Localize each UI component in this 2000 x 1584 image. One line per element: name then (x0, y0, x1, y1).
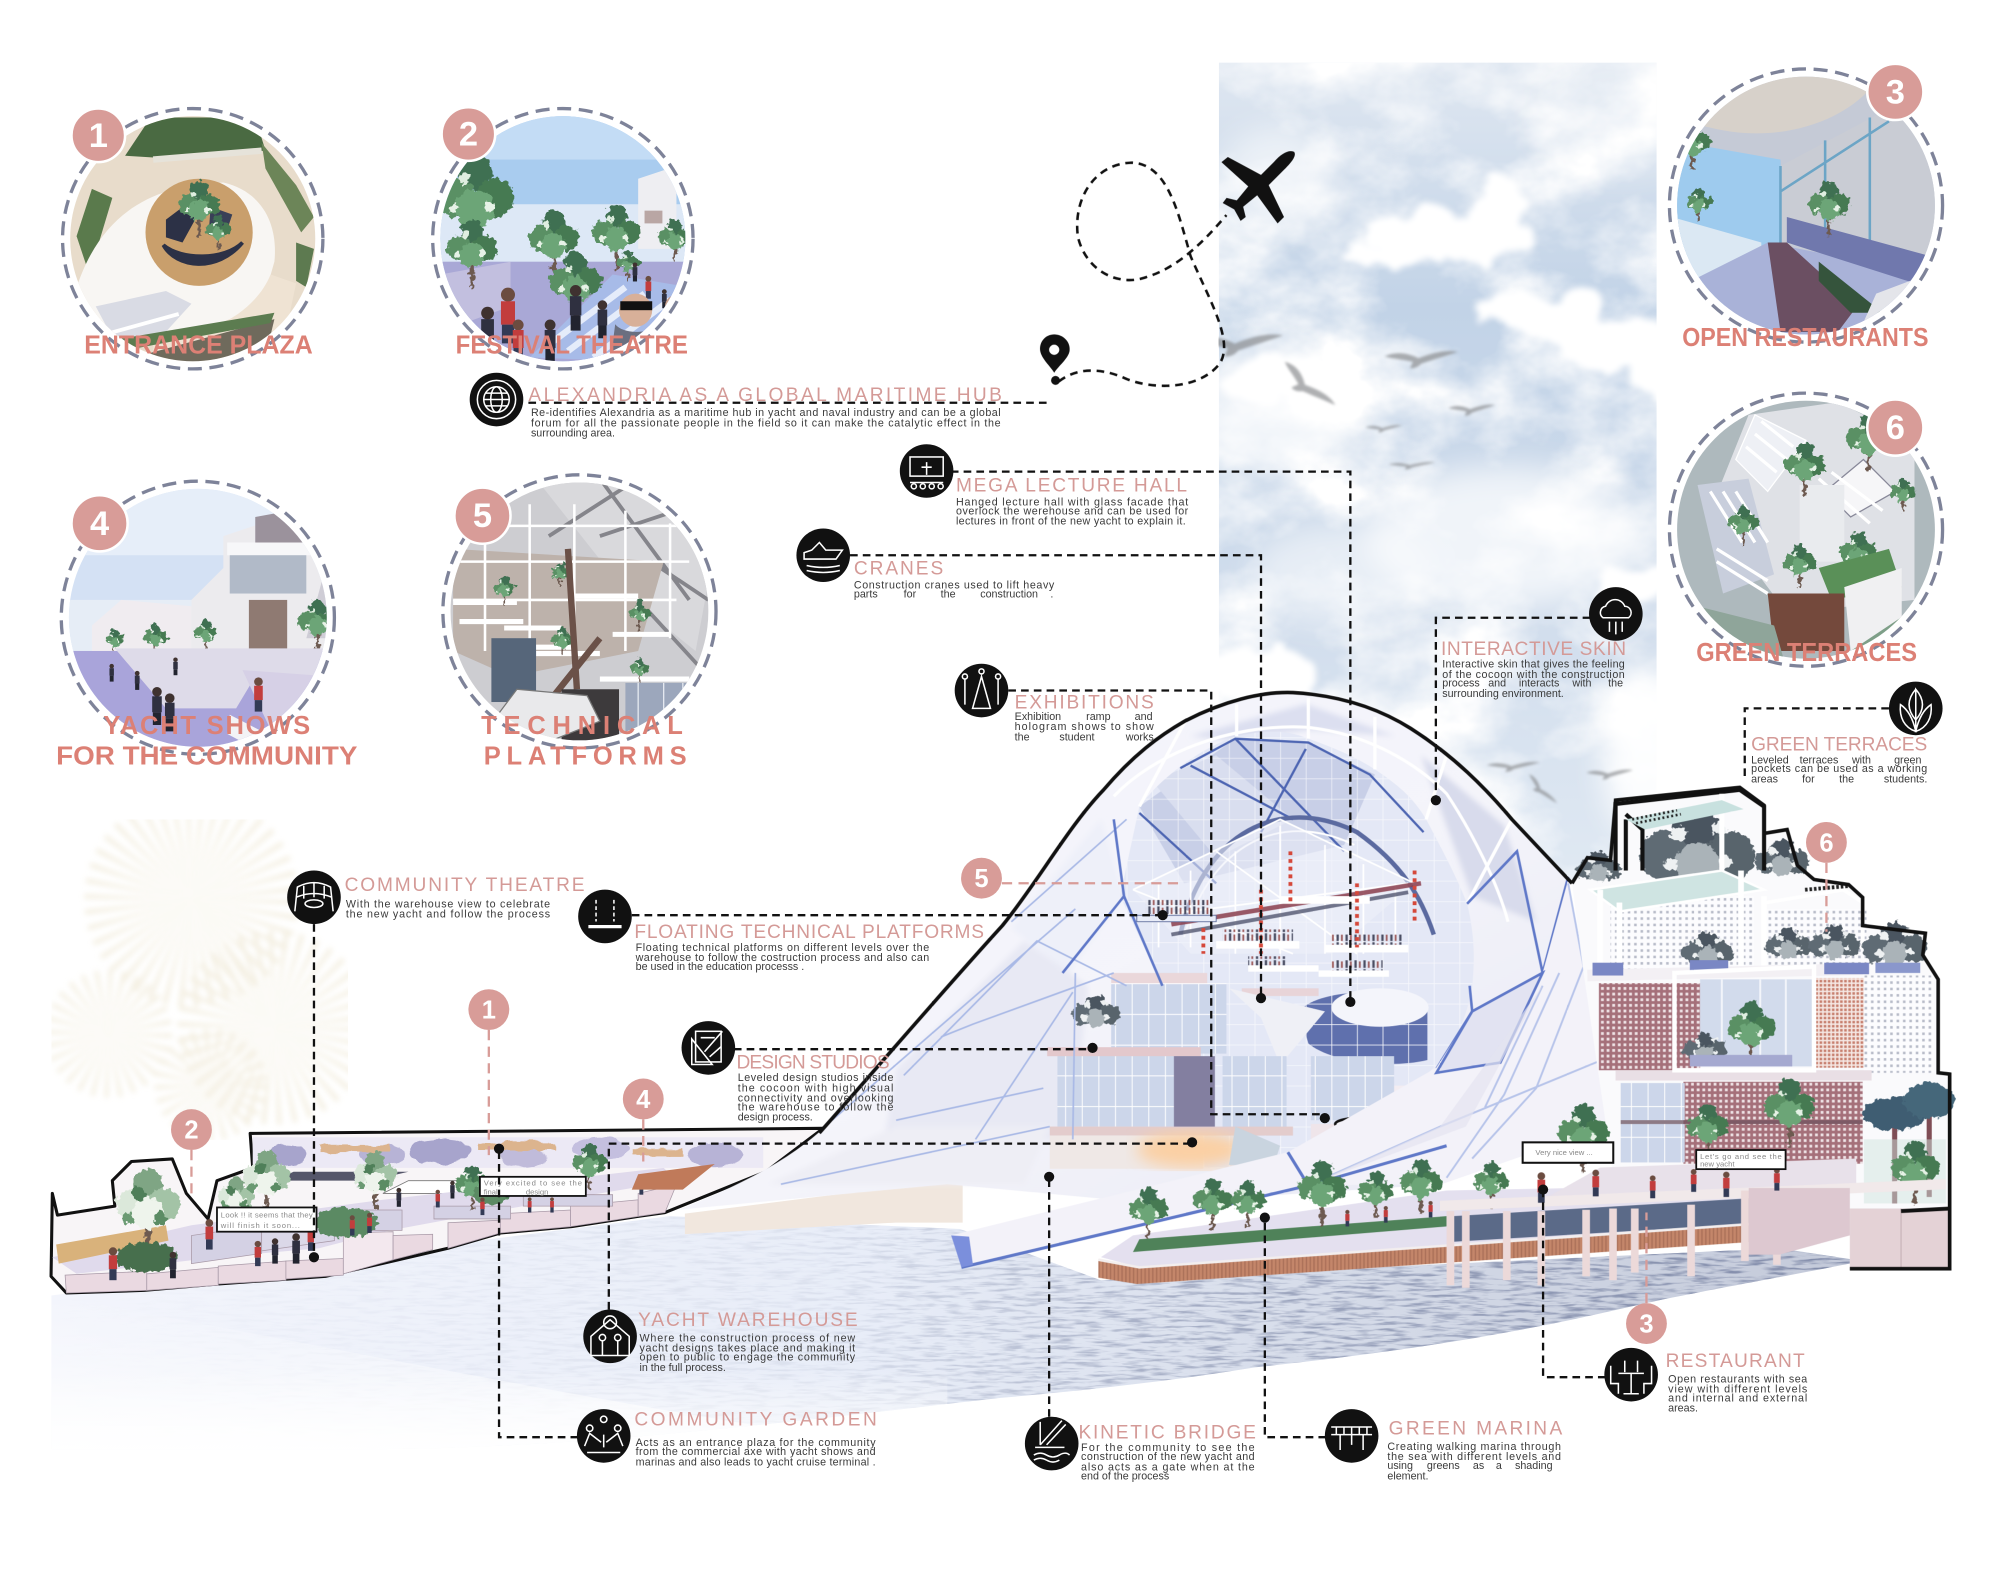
circle 4: yacht shows (56, 481, 357, 771)
annotation: yacht warehouse: YACHT WAREHOUSE (638, 1310, 858, 1331)
annotation: exhibitions: the (1015, 731, 1030, 743)
circle 5: technical platforms: TECHNICAL (481, 712, 683, 740)
annotation: green marina (1325, 1409, 1562, 1482)
palms (1863, 1083, 1955, 1205)
circle 2: festival theatre: FESTIVAL THEATRE (456, 332, 688, 360)
annotation: community theatre (287, 870, 585, 924)
annotation: kinetic bridge: For the community to see the (1081, 1442, 1255, 1454)
annotation: green terraces: with (1851, 754, 1871, 766)
annotation: interactive skin: the (1608, 678, 1623, 690)
wooden edge (1098, 1223, 1772, 1284)
speech bubbles: final (484, 1188, 498, 1197)
annotation: interactive skin: Interactive skin that gives the feeling (1442, 659, 1625, 671)
annotation: restaurant: view with different levels (1668, 1384, 1807, 1396)
annotation: mega lecture hall: lectures in front of the new yacht to explain it. (956, 516, 1186, 528)
annotation: restaurant: areas. (1668, 1403, 1698, 1415)
annotation: yacht warehouse (583, 1310, 858, 1374)
pier deck and columns (1440, 1179, 1946, 1288)
annotation: kinetic bridge: KINETIC BRIDGE (1078, 1422, 1256, 1443)
screen levels (1610, 896, 1754, 970)
annotation: interactive skin: INTERACTIVE SKIN (1441, 639, 1626, 660)
annotation: community garden: from the commercial axe with yacht shows and (636, 1446, 876, 1458)
annotation: yacht warehouse: yacht designs takes place and making it (639, 1343, 855, 1355)
annotation: design studios (682, 1021, 893, 1124)
pink numbered markers: 5 (974, 865, 989, 893)
building outline (1572, 787, 1950, 1269)
lecture hall oval (1299, 988, 1429, 1064)
annotation: global maritime hub: forum for all the passionate people in the field so it can make the catalytic effect in the (531, 417, 1001, 429)
annotation: cranes (796, 528, 1055, 600)
pink numbered markers (171, 822, 1847, 1344)
annotation: community garden (577, 1409, 877, 1468)
annotation: floating technical platforms: Floating technical platforms on different levels over the (636, 942, 929, 954)
circle 5: technical platforms (440, 475, 721, 771)
annotation: community theatre: the new yacht and follow the process (346, 909, 550, 921)
cocoon glass shell (678, 692, 1614, 1267)
annotation: exhibitions: student (1059, 731, 1095, 743)
annotation: kinetic bridge: construction of the new yacht and (1081, 1451, 1255, 1463)
annotation: exhibitions: hologram shows to show (1015, 721, 1154, 733)
annotation: mega lecture hall: overlock the werehouse and can be used for (956, 505, 1189, 517)
icon: location pin (1040, 334, 1070, 373)
circle 2: festival theatre: 2 (459, 116, 478, 154)
annotation: design studios: the cocoon with high visual (738, 1082, 893, 1094)
annotation: mega lecture hall: Hanged lecture hall with glass facade that (956, 496, 1188, 508)
icon: airplane (1221, 151, 1295, 223)
green marina (1098, 1159, 1946, 1288)
shell black outline (819, 692, 1572, 1133)
annotation: floating technical platforms: warehouse to follow the costruction process and also can (635, 952, 929, 964)
location dot (1051, 376, 1060, 385)
annotation: restaurant: and internal and external (1668, 1392, 1807, 1404)
annotation: floating technical platforms (578, 890, 984, 973)
annotation: design studios: the warehouse to follow the (738, 1101, 893, 1113)
ramp and right strip (951, 880, 1614, 1267)
annotation: design studios: DESIGN STUDIOS (736, 1052, 890, 1073)
annotation: green marina: as (1473, 1460, 1484, 1472)
stepped seating (65, 1184, 676, 1293)
circle 3: open restaurants (1666, 64, 1946, 357)
annotation: green terraces: for (1802, 773, 1815, 785)
annotation: green marina: the sea with different levels and (1387, 1451, 1561, 1463)
speech bubbles: new yacht (1700, 1160, 1735, 1169)
annotation: green marina: shading (1515, 1460, 1553, 1472)
annotation: global maritime hub (470, 373, 1002, 440)
planter window box (1674, 967, 1815, 1070)
speech bubbles: Very nice view ... (1535, 1148, 1593, 1157)
circle 4: yacht shows: FOR THE COMMUNITY (56, 743, 357, 771)
pink numbered markers: 4 (636, 1086, 651, 1114)
fireworks backdrop (77, 846, 323, 1113)
terraced building (1558, 787, 1955, 1269)
annotation: green terraces: Leveled (1751, 754, 1789, 766)
annotation: exhibitions: works (1125, 731, 1154, 743)
circle 6: green terraces: 6 (1886, 409, 1905, 447)
shell facets (768, 704, 1536, 1184)
annotation: green terraces (1751, 682, 1943, 785)
plaza trees (116, 1143, 607, 1273)
annotation: interactive skin: of the cocoon with the construction (1442, 669, 1625, 681)
annotation: design studios: design process. (738, 1112, 813, 1124)
circle 4: yacht shows: YACHT SHOWS (103, 712, 310, 740)
annotation: green terraces: GREEN TERRACES (1751, 735, 1927, 756)
water surface (52, 1216, 1850, 1425)
circle 3: open restaurants: OPEN RESTAURANTS (1682, 324, 1929, 352)
annotation: global maritime hub: Re-identifies Alexandria as a maritime hub in yacht and naval industry and can be a global (531, 407, 1001, 419)
annotation: exhibitions: EXHIBITIONS (1015, 692, 1154, 713)
annotation: mega lecture hall: MEGA LECTURE HALL (956, 475, 1187, 496)
cocoon interior (1120, 732, 1474, 1154)
annotation: community garden: COMMUNITY GARDEN (634, 1410, 877, 1431)
annotation: kinetic bridge: end of the process (1081, 1470, 1169, 1482)
annotation: kinetic bridge: also acts as a gate when at the (1081, 1461, 1255, 1473)
pink numbered markers: 1 (482, 997, 496, 1025)
pink numbered markers: 6 (1819, 829, 1834, 857)
annotation: cranes: CRANES (854, 558, 943, 579)
annotation: green marina: greens (1427, 1460, 1460, 1472)
left plaza section (51, 1128, 823, 1293)
annotation: green marina: a (1496, 1460, 1502, 1472)
annotation: yacht warehouse: in the full process. (639, 1362, 726, 1374)
annotation: green terraces: pockets can be used as a working (1751, 763, 1927, 775)
annotation: floating technical platforms: be used in the education processs . (636, 961, 804, 973)
annotation: exhibitions: ramp (1086, 711, 1111, 723)
circle 4: yacht shows: 4 (90, 505, 109, 543)
annotation: interactive skin: with (1571, 678, 1592, 690)
annotation: green marina: Creating walking marina through (1387, 1441, 1561, 1453)
annotation: interactive skin (1441, 587, 1643, 700)
flight path (1059, 163, 1226, 386)
annotation: kinetic bridge (1025, 1417, 1256, 1482)
speech bubbles: Look !! it seems that they (221, 1211, 313, 1220)
annotation: green terraces: areas (1751, 773, 1778, 785)
annotation: cranes: parts (854, 588, 878, 600)
annotation: restaurant (1604, 1348, 1807, 1415)
birds (1193, 334, 1633, 809)
annotation: exhibitions: Exhibition (1015, 711, 1061, 723)
pink numbered markers: 2 (184, 1117, 199, 1145)
circle 6: green terraces: GREEN TERRACES (1696, 639, 1917, 667)
annotation: cranes: Construction cranes used to lift heavy (854, 579, 1055, 591)
annotation: green marina: element. (1387, 1470, 1428, 1482)
plaza people (109, 1177, 644, 1280)
speech bubbles: design (526, 1188, 548, 1197)
annotation: interactive skin: and (1488, 678, 1506, 690)
speech bubbles: will finish it soon... (220, 1221, 300, 1230)
circle 6: green terraces (1666, 393, 1946, 670)
annotation: community theatre: COMMUNITY THEATRE (345, 875, 585, 896)
annotation: green terraces: green (1894, 754, 1922, 766)
annotation: design studios: Leveled design studios inside (738, 1072, 893, 1084)
annotation: green marina: GREEN MARINA (1389, 1419, 1562, 1440)
circle 5: technical platforms: PLATFORMS (484, 743, 687, 771)
annotation: interactive skin: interacts (1519, 678, 1559, 690)
annotation: mega lecture hall (900, 444, 1189, 528)
annotation: restaurant: RESTAURANT (1666, 1351, 1805, 1372)
annotation: green terraces: the (1839, 773, 1854, 785)
annotation: cranes: construction (980, 588, 1038, 600)
annotation: cranes: the (941, 588, 956, 600)
annotation: community garden: Acts as an entrance plaza for the community (636, 1437, 876, 1449)
annotation: restaurant: Open restaurants with sea (1668, 1373, 1807, 1385)
top pergola cube (1576, 790, 1809, 896)
annotation: cranes: for (904, 588, 917, 600)
annotation: global maritime hub: surrounding area. (531, 428, 615, 440)
annotation: global maritime hub: ALEXANDRIA AS A GLOBAL MARITIME HUB (528, 385, 1002, 406)
brick facades (1599, 983, 1674, 1070)
circle 2: festival theatre (433, 107, 696, 377)
pink numbered markers: 3 (1639, 1311, 1654, 1339)
leader lines and endpoints (309, 403, 1889, 1437)
annotation: interactive skin: surrounding environment. (1442, 688, 1564, 700)
circle 1: entrance plaza: ENTRANCE PLAZA (84, 332, 313, 360)
circle 3: open restaurants: 3 (1886, 73, 1905, 111)
annotation: exhibitions (955, 664, 1154, 743)
circle 1: entrance plaza: 1 (89, 117, 108, 155)
circle 1: entrance plaza (63, 109, 325, 373)
sky panel with clouds (1218, 62, 1656, 880)
annotation: yacht warehouse: open to public to engage the community (639, 1352, 856, 1364)
speech bubbles: Let's go and see the (1700, 1152, 1782, 1161)
speech bubbles (217, 1142, 1786, 1232)
speech bubbles: Very excited to see the (484, 1179, 582, 1188)
annotation: cranes: . (1050, 588, 1053, 600)
design studio floors (1047, 973, 1293, 1169)
circle 5: technical platforms: 5 (473, 497, 492, 535)
annotation: green terraces: terraces (1800, 754, 1838, 766)
distant rock garden (269, 1137, 743, 1168)
shell ribs (781, 698, 1568, 1184)
annotation: interactive skin: process (1442, 678, 1480, 690)
annotation: design studios: connectivity and overlooking (738, 1093, 893, 1105)
suspended platforms (1137, 851, 1415, 977)
annotation: green terraces: students. (1884, 773, 1927, 785)
annotation: community garden: marinas and also leads to yacht cruise terminal . (636, 1456, 876, 1468)
annotation: floating technical platforms: FLOATING TECHNICAL PLATFORMS (634, 922, 984, 943)
cocoon plinth (685, 1178, 963, 1234)
annotation: yacht warehouse: Where the construction process of new (639, 1332, 855, 1344)
annotation: community theatre: With the warehouse view to celebrate (346, 899, 550, 911)
annotation: green marina: using (1387, 1460, 1413, 1472)
annotation: exhibitions: and (1135, 711, 1153, 723)
